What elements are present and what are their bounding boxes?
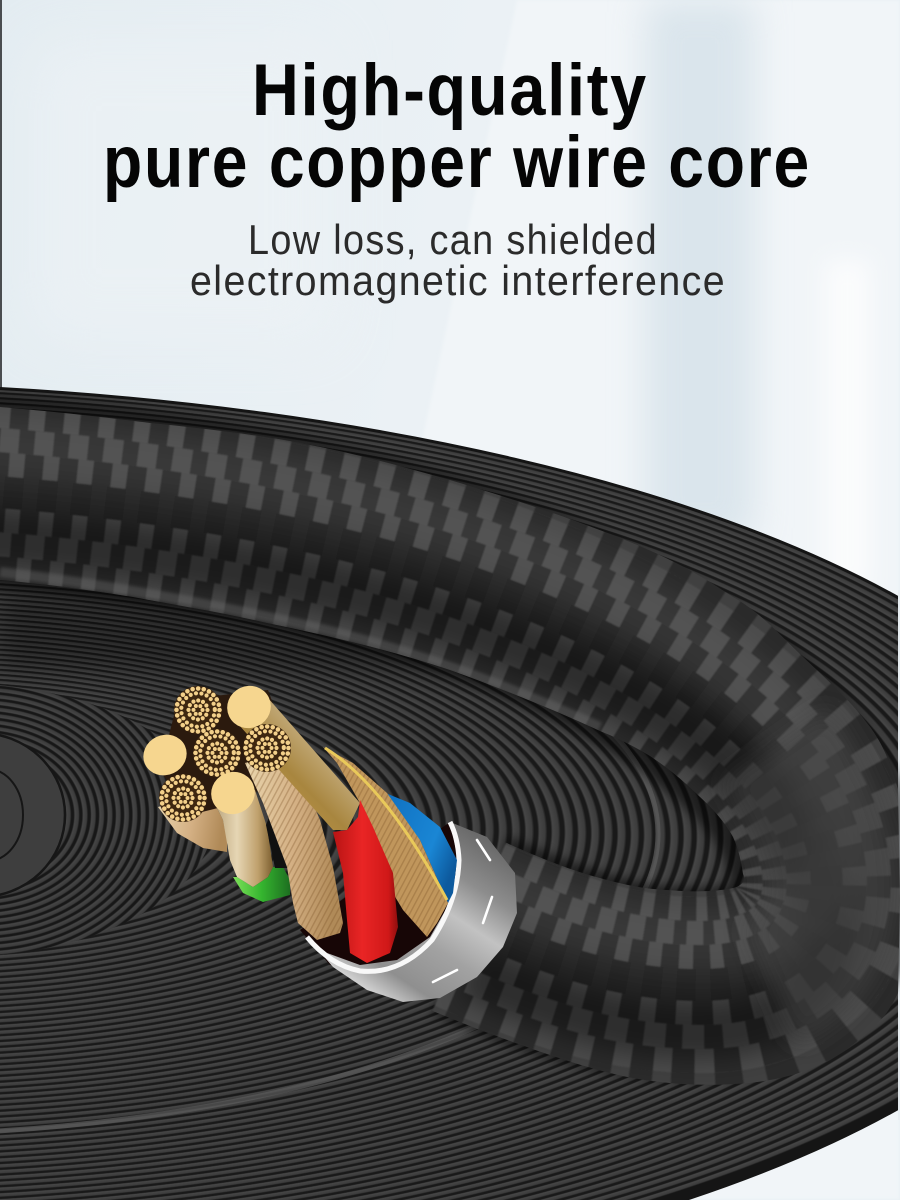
black ribbed cable reel disc bbox=[0, 388, 900, 1200]
stranded end: lower left bbox=[159, 774, 207, 822]
gold twisted wire bbox=[323, 747, 448, 937]
subheading: electromagnetic interference bbox=[190, 257, 726, 304]
solid end: left bbox=[137, 728, 193, 782]
subheading bbox=[190, 216, 726, 304]
stranded end: right bbox=[243, 724, 291, 772]
cable end connector: silver sleeve bbox=[307, 822, 517, 1002]
black gap bbox=[266, 815, 288, 868]
tan twisted wire: large bbox=[245, 750, 343, 940]
solid end: lower bbox=[204, 765, 262, 821]
blue insulated wire bbox=[383, 792, 457, 903]
dark interior behind wires bbox=[300, 822, 462, 975]
subheading: Low loss, can shielded bbox=[248, 216, 658, 263]
heading: pure copper wire core bbox=[103, 122, 811, 203]
solid copper wire: top bbox=[230, 698, 360, 830]
stranded end: centre bbox=[193, 729, 241, 777]
end-cap backing bbox=[160, 690, 290, 815]
heading: High-quality bbox=[252, 50, 648, 131]
stranded end: top bbox=[174, 686, 222, 734]
green insulated wire bbox=[233, 867, 290, 902]
braided cable bbox=[0, 446, 835, 1031]
red insulated wire bbox=[333, 800, 398, 963]
tan strand wire: lower left bbox=[158, 793, 227, 852]
solid copper wire: lower bbox=[213, 790, 273, 887]
heading bbox=[103, 50, 811, 203]
exposed wire core bbox=[137, 679, 517, 1002]
solid end: top bbox=[220, 679, 278, 735]
